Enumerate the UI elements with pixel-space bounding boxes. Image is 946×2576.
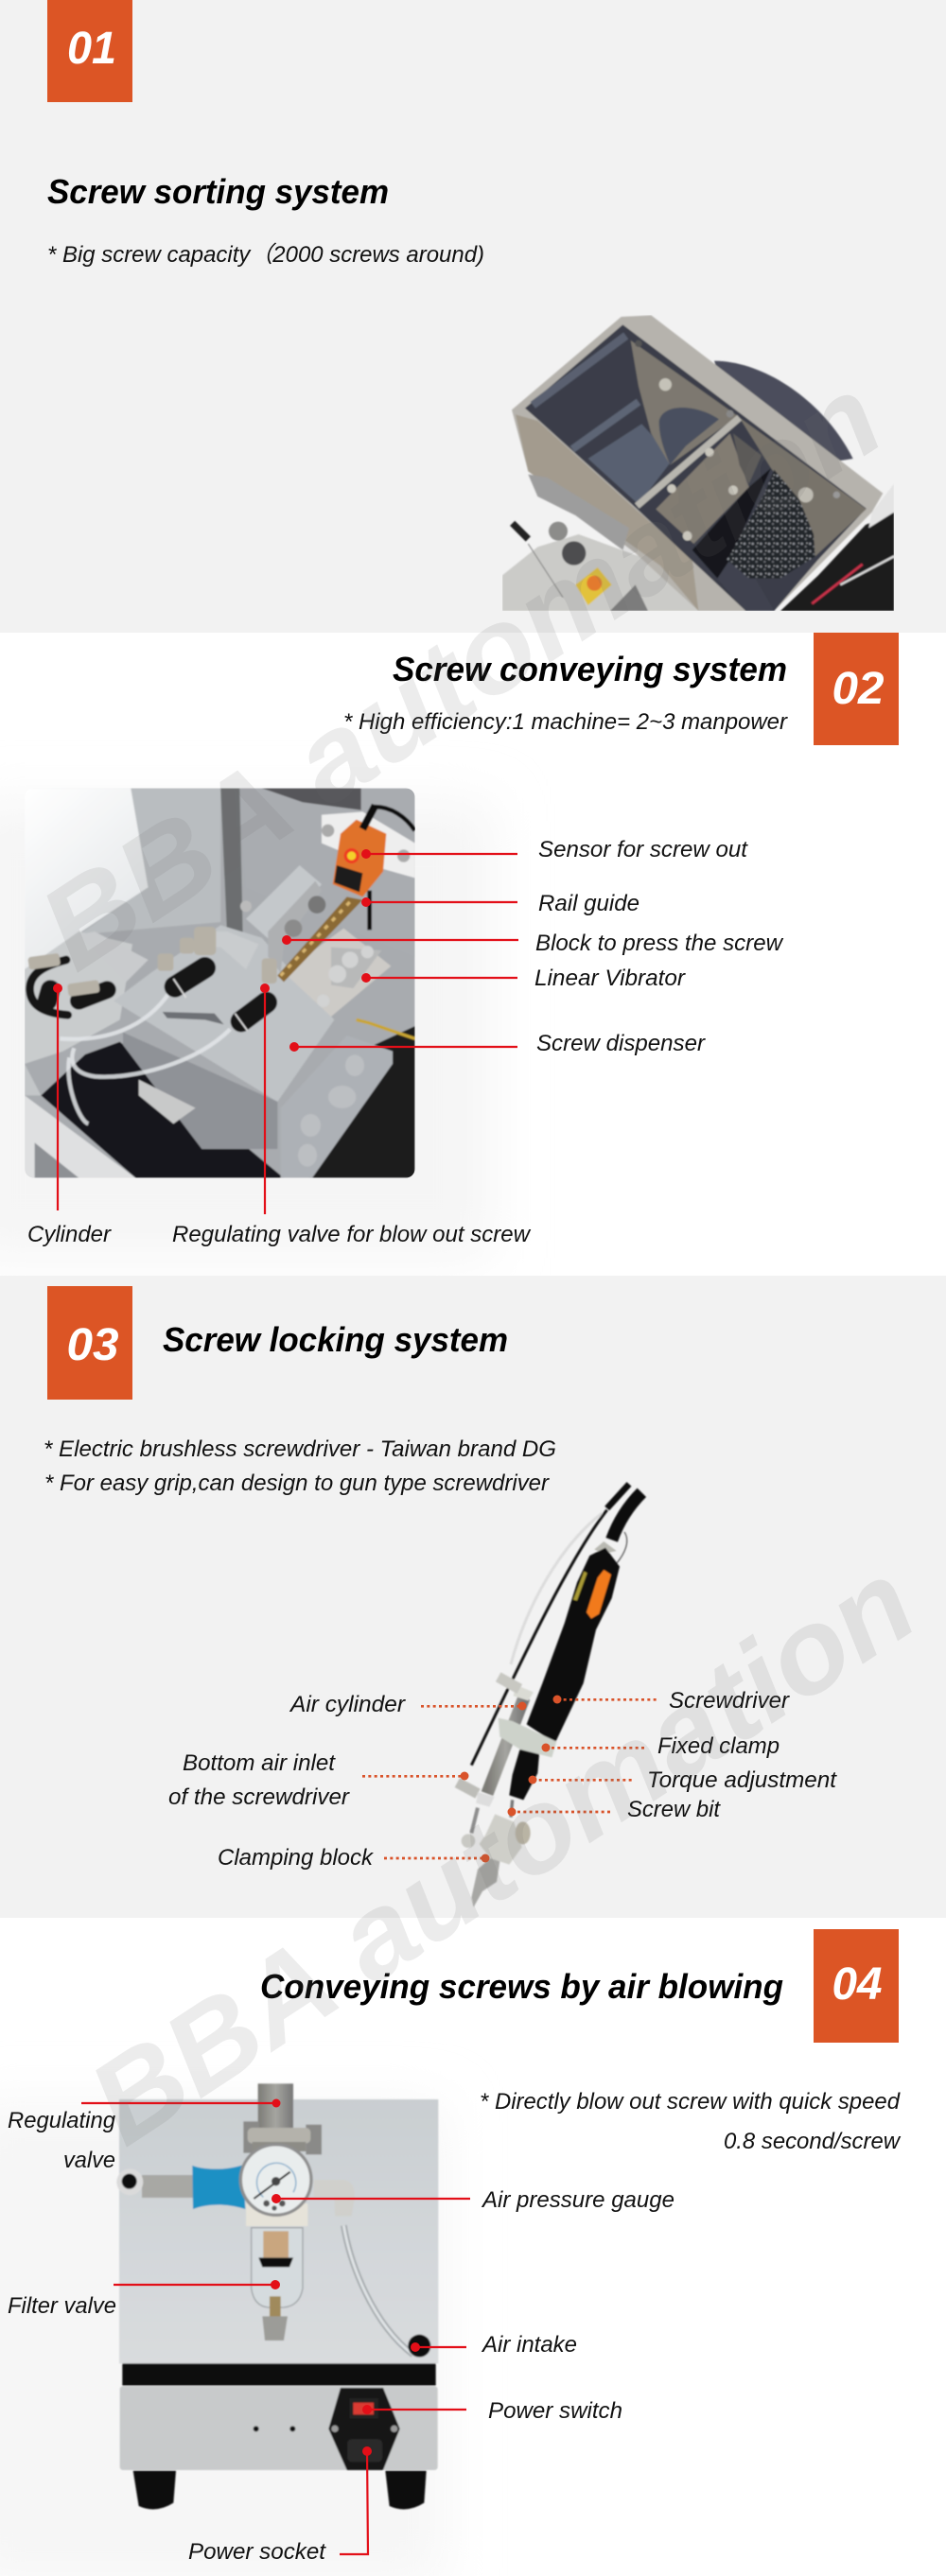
callouts: air unit labels: valve xyxy=(63,2148,115,2173)
panel: 04 conveying screws by air blowing xyxy=(8,1929,902,2565)
text: blow out speed: 0.8 second/screw xyxy=(724,2129,902,2154)
text: screwdriver notes: * Electric brushless screwdriver - Taiwan brand DG xyxy=(44,1436,556,1462)
text: efficiency: * High efficiency:1 machine= 2~3 manpower xyxy=(343,709,788,735)
text: screwdriver notes: * For easy grip,can design to gun type screwdriver xyxy=(44,1471,550,1496)
watermark: BBA automation (upper): BBA automation xyxy=(18,351,904,996)
heading: screw locking system: Screw locking system xyxy=(163,1320,508,1359)
callouts: conveying labels: Block to press the screw xyxy=(535,931,784,956)
callouts: locking labels xyxy=(168,1688,837,1871)
text: capacity: * Big screw capacity（2000 screws around) xyxy=(47,242,484,268)
text: screwdriver notes xyxy=(44,1436,556,1496)
callouts: conveying labels: Rail guide xyxy=(538,891,639,916)
callouts: conveying labels xyxy=(27,837,784,1247)
panel: 03 screw locking system xyxy=(44,1286,837,1907)
callouts: air unit labels: Regulating xyxy=(8,2108,116,2133)
heading: screw conveying system: Screw conveying system xyxy=(393,650,787,688)
callouts: locking labels: Torque adjustment xyxy=(647,1767,837,1793)
photo: conveying mechanism xyxy=(25,788,415,1178)
callouts: air unit labels: Power switch xyxy=(488,2398,622,2424)
callouts: air unit labels: Power socket xyxy=(188,2539,326,2565)
panel: 02 screw conveying system xyxy=(25,633,899,1247)
callouts: locking labels: Fixed clamp xyxy=(657,1733,780,1759)
badge 03 xyxy=(47,1286,132,1400)
callouts: conveying labels: Screw dispenser xyxy=(536,1031,706,1056)
badge 04: 04 xyxy=(832,1959,882,2010)
callouts: air unit labels: Air intake xyxy=(481,2332,577,2358)
photo: screw hopper xyxy=(502,315,894,611)
callouts: locking labels: Clamping block xyxy=(218,1845,375,1871)
badge 01: 01 xyxy=(67,24,116,74)
callouts: locking labels: Bottom air inlet xyxy=(183,1750,336,1776)
text: blow out speed: * Directly blow out screw with quick speed xyxy=(480,2089,901,2115)
badge 03: 03 xyxy=(66,1320,119,1370)
callouts: conveying labels: Regulating valve for blow out screw xyxy=(172,1222,532,1247)
callouts: air unit labels: Air pressure gauge xyxy=(481,2187,674,2213)
photo: air pressure unit xyxy=(116,2083,438,2509)
heading: conveying screws by air blowing: Conveying screws by air blowing xyxy=(260,1967,783,2006)
callouts: locking labels: Air cylinder xyxy=(289,1692,406,1717)
badge 01 xyxy=(47,0,132,102)
heading: screw sorting system: Screw sorting system xyxy=(47,172,389,211)
panel: 01 screw sorting system xyxy=(47,0,894,611)
callouts: conveying labels: Linear Vibrator xyxy=(534,966,686,991)
callouts: air unit labels: Filter valve xyxy=(8,2293,116,2319)
callouts: air unit labels xyxy=(8,2099,674,2565)
callouts: locking labels: Screw bit xyxy=(627,1797,721,1822)
watermark: BBA automation (lower): BBA automation xyxy=(67,1536,937,2170)
callouts: locking labels: Screwdriver xyxy=(669,1688,790,1714)
badge 02: 02 xyxy=(832,664,885,714)
photo: electric screwdriver assembly xyxy=(457,1484,641,1907)
callouts: conveying labels: Cylinder xyxy=(27,1222,112,1247)
callouts: conveying labels: Sensor for screw out xyxy=(538,837,748,862)
badge 02 xyxy=(814,633,899,745)
callouts: locking labels: of the screwdriver xyxy=(168,1784,350,1810)
badge 04 xyxy=(814,1929,899,2043)
text: blow out speed xyxy=(480,2089,902,2154)
